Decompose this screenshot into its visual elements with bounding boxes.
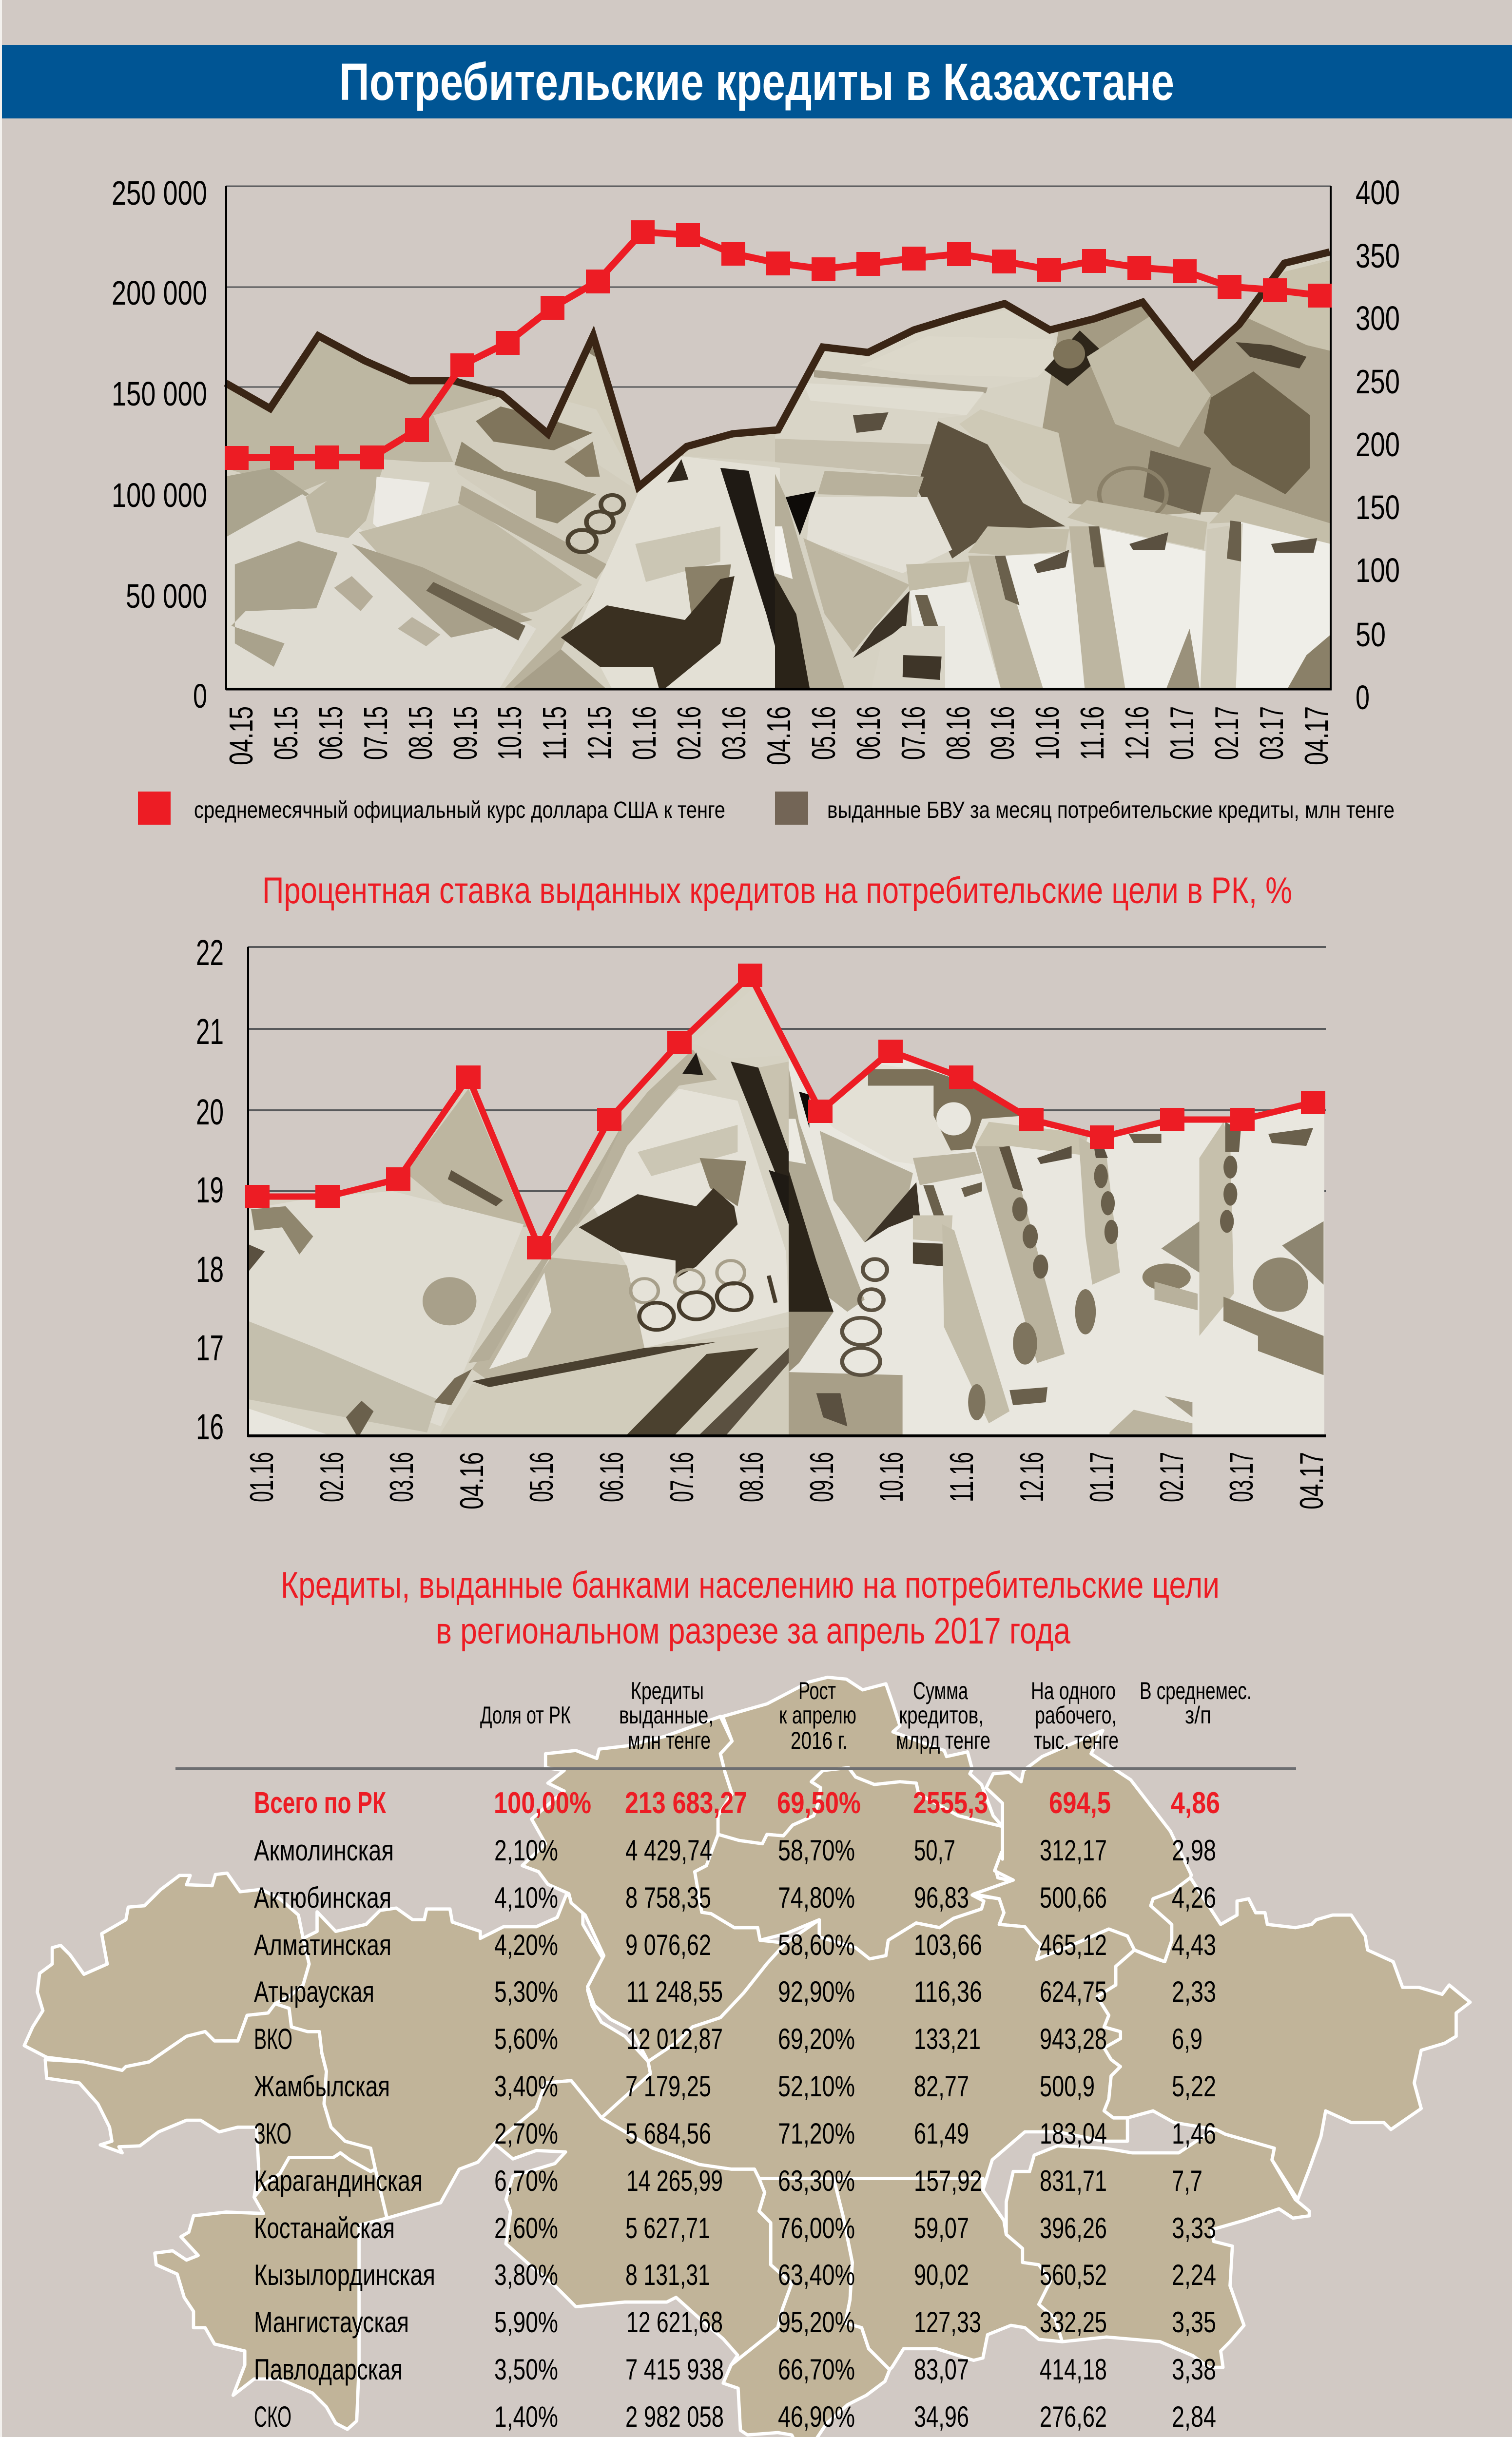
- table header: кредитов,: [899, 1702, 984, 1729]
- row: North Kazakhstan: СКО: [254, 2400, 291, 2433]
- table header: Кредиты: [631, 1677, 704, 1704]
- x axis labels: 03.16: [383, 1452, 420, 1502]
- row: Kyzylorda: 560,52: [1040, 2259, 1107, 2291]
- x axis labels: 01.17: [1163, 706, 1201, 760]
- row: Atyrau: 92,90%: [778, 1975, 855, 2008]
- x axis labels: 01.16: [243, 1452, 280, 1502]
- row: Zhambyl: Жамбылская: [254, 2070, 390, 2103]
- row: East Kazakhstan: 69,20%: [778, 2023, 855, 2055]
- row: total: 69,50%: [777, 1786, 861, 1820]
- row: East Kazakhstan: 943,28: [1040, 2023, 1107, 2055]
- map region: Kyzylorda: [494, 2081, 792, 2365]
- row: Kostanay: 5 627,71: [625, 2212, 710, 2244]
- left axis labels: 0: [193, 677, 207, 715]
- row: Karaganda: 6,70%: [494, 2165, 558, 2197]
- map region: Atyrau: [45, 2004, 375, 2197]
- row: Atyrau: Атырауская: [254, 1975, 374, 2008]
- row: West Kazakhstan: ЗКО: [254, 2117, 291, 2150]
- row: Mangystau: 3,35: [1172, 2306, 1216, 2339]
- row: Kyzylorda: 90,02: [914, 2259, 969, 2291]
- row: Pavlodar: 66,70%: [778, 2353, 855, 2386]
- x axis labels: 10.15: [491, 706, 528, 760]
- heading: regional loans: Кредиты, выданные банками населению на потребительские цели: [281, 1565, 1220, 1606]
- row: Karaganda: 63,30%: [778, 2165, 855, 2197]
- row: Kyzylorda: Кызылординская: [254, 2259, 435, 2291]
- row: Kyzylorda: 8 131,31: [625, 2259, 710, 2291]
- table header: Сумма: [913, 1677, 968, 1704]
- map region: East Kazakhstan: [1097, 1878, 1470, 2200]
- table header: тыс. тенге: [1034, 1727, 1119, 1754]
- legend item: loans issued: [775, 792, 1395, 825]
- legend item: loans issued: выданные БВУ за месяц потребительские кредиты, млн тенге: [827, 797, 1395, 823]
- x axis labels: 04.17: [1293, 1452, 1330, 1509]
- row: East Kazakhstan: ВКО: [254, 2023, 292, 2055]
- table header: к апрелю: [779, 1702, 856, 1729]
- x axis labels: 02.16: [313, 1452, 350, 1502]
- row: Zhambyl: 52,10%: [778, 2070, 855, 2103]
- x axis labels: 02.17: [1208, 706, 1245, 760]
- row: Mangystau: 12 621,68: [626, 2306, 723, 2339]
- row: Zhambyl: 3,40%: [494, 2070, 558, 2103]
- table header: В среднемес.: [1140, 1677, 1252, 1704]
- row: Karaganda: 157,92: [914, 2165, 982, 2197]
- row: Kostanay: 3,33: [1172, 2212, 1216, 2244]
- row: Akmola: 2,10%: [494, 1834, 558, 1867]
- row: Mangystau: 5,90%: [494, 2306, 558, 2339]
- row: Aktobe: 4,26: [1172, 1881, 1216, 1914]
- row: Kostanay: 2,60%: [494, 2212, 558, 2244]
- y axis labels: 19: [196, 1170, 224, 1210]
- row: East Kazakhstan: 6,9: [1172, 2023, 1202, 2055]
- row: Almaty region: Алматинская: [254, 1929, 391, 1961]
- map of Kazakhstan regions: [24, 1677, 1470, 2437]
- row: West Kazakhstan: 5 684,56: [625, 2117, 711, 2150]
- x axis labels: 09.15: [447, 706, 484, 760]
- row: West Kazakhstan: 183,04: [1040, 2117, 1107, 2150]
- row: East Kazakhstan: 5,60%: [494, 2023, 558, 2055]
- map region: Kostanay: [522, 1717, 786, 2062]
- chart: consumer loans and USD rate: [112, 174, 1400, 765]
- row: Kostanay: 396,26: [1040, 2212, 1107, 2244]
- x axis labels: 07.16: [663, 1452, 700, 1502]
- map region: Mangystau: [155, 2153, 387, 2429]
- x axis labels: 11.16: [1074, 706, 1111, 760]
- right axis labels: 350: [1356, 237, 1400, 275]
- table header: млн тенге: [628, 1727, 711, 1754]
- legend: [138, 792, 1395, 825]
- right axis labels: 100: [1356, 551, 1400, 589]
- x axis labels: 03.17: [1253, 706, 1290, 760]
- row: Almaty region: 103,66: [914, 1929, 982, 1961]
- row: Akmola: 312,17: [1040, 1834, 1107, 1867]
- table header: На одного: [1031, 1677, 1116, 1704]
- row: Kostanay: [254, 2212, 1216, 2244]
- row: Mangystau: [254, 2306, 1216, 2339]
- x axis labels: 12.16: [1013, 1452, 1050, 1502]
- row: Mangystau: Мангистауская: [254, 2306, 409, 2339]
- row: Zhambyl: 7 179,25: [625, 2070, 711, 2103]
- row: East Kazakhstan: 12 012,87: [626, 2023, 723, 2055]
- map region: Akmola: [695, 1768, 1012, 1959]
- row: Almaty region: 9 076,62: [625, 1929, 711, 1961]
- heading: regional loans: в региональном разрезе за апрель 2017 года: [436, 1610, 1071, 1652]
- row: Kyzylorda: 3,80%: [494, 2259, 558, 2291]
- x axis labels: 12.16: [1119, 706, 1156, 760]
- x axis labels: 08.16: [940, 706, 977, 760]
- y axis labels: 16: [196, 1407, 224, 1447]
- row: Zhambyl: 5,22: [1172, 2070, 1216, 2103]
- x axis labels: 01.16: [626, 706, 663, 760]
- map region: Zhambyl: [834, 2179, 1062, 2370]
- row: Mangystau: 332,25: [1040, 2306, 1107, 2339]
- row: Kostanay: 59,07: [914, 2212, 969, 2244]
- row: total: [254, 1786, 1220, 1820]
- x axis labels: 06.16: [593, 1452, 630, 1502]
- x axis labels: 02.16: [671, 706, 708, 760]
- map region: West Kazakhstan: [24, 1873, 309, 2070]
- left axis labels: [112, 174, 207, 715]
- x axis labels: 02.17: [1153, 1452, 1190, 1502]
- row: Akmola: 58,70%: [778, 1834, 855, 1867]
- row: West Kazakhstan: 71,20%: [778, 2117, 855, 2150]
- row: total: 2555,3: [913, 1786, 988, 1820]
- title: Потребительские кредиты в Казахстане: [339, 52, 1174, 111]
- x axis labels: [243, 1452, 1330, 1509]
- row: North Kazakhstan: 1,40%: [494, 2400, 558, 2433]
- row: Zhambyl: 82,77: [914, 2070, 969, 2103]
- row: Atyrau: 5,30%: [494, 1975, 558, 2008]
- x axis labels: 10.16: [873, 1452, 910, 1502]
- axes: [248, 947, 1326, 1437]
- row: North Kazakhstan: 2 982 058: [625, 2400, 724, 2433]
- row: East Kazakhstan: 133,21: [914, 2023, 981, 2055]
- row: Pavlodar: 3,38: [1172, 2353, 1216, 2386]
- table header: Доля от РК: [480, 1702, 571, 1729]
- left axis labels: 200 000: [112, 274, 207, 312]
- x axis labels: 12.15: [581, 706, 618, 760]
- x axis labels: [223, 706, 1335, 765]
- row: total: Всего по РК: [254, 1786, 386, 1820]
- map region: Aktobe: [275, 1894, 650, 2218]
- x axis labels: 07.15: [357, 706, 394, 760]
- right axis labels: 50: [1356, 616, 1386, 654]
- row: Akmola: [254, 1834, 1216, 1867]
- row: Kyzylorda: [254, 2259, 1216, 2291]
- map region: Karaganda: [601, 1895, 1134, 2190]
- grid lines: [248, 947, 1326, 1191]
- row: Aktobe: 8 758,35: [625, 1881, 711, 1914]
- x axis labels: 11.16: [943, 1452, 980, 1502]
- right axis labels: 150: [1356, 488, 1400, 526]
- x axis labels: 08.15: [402, 706, 439, 760]
- x axis labels: 01.17: [1083, 1452, 1120, 1502]
- left axis labels: 150 000: [112, 375, 207, 413]
- line: USD exchange rate: [225, 220, 1332, 470]
- row: Almaty region: 4,20%: [494, 1929, 558, 1961]
- row: Karaganda: 831,71: [1040, 2165, 1107, 2197]
- x axis labels: 05.16: [805, 706, 842, 760]
- row: Aktobe: Актюбинская: [254, 1881, 391, 1914]
- row: Aktobe: 96,83: [914, 1881, 969, 1914]
- row: North Kazakhstan: 34,96: [914, 2400, 969, 2433]
- map region: Pavlodar: [973, 1730, 1191, 1962]
- row: Karaganda: Карагандинская: [254, 2165, 423, 2197]
- heading: interest rate: Процентная ставка выданных кредитов на потребительские цели в РК, %: [262, 870, 1292, 911]
- row: Mangystau: 95,20%: [778, 2306, 855, 2339]
- row: Karaganda: 7,7: [1172, 2165, 1202, 2197]
- x axis labels: 08.16: [733, 1452, 770, 1502]
- row: Almaty region: 4,43: [1172, 1929, 1216, 1961]
- right axis labels: [1356, 174, 1400, 716]
- row: Kostanay: 76,00%: [778, 2212, 855, 2244]
- row: Akmola: 2,98: [1172, 1834, 1216, 1867]
- area: banknote photo fill: [224, 244, 1332, 693]
- legend item: exchange rate: среднемесячный официальный курс доллара США к тенге: [194, 797, 725, 823]
- y axis labels: 17: [196, 1328, 224, 1368]
- x axis labels: 04.16: [453, 1452, 490, 1509]
- row: Pavlodar: 83,07: [914, 2353, 969, 2386]
- x axis labels: 07.16: [895, 706, 932, 760]
- left axis labels: 100 000: [112, 476, 207, 514]
- y axis labels: 18: [196, 1249, 224, 1290]
- x axis labels: 03.17: [1223, 1452, 1260, 1502]
- map region: North Kazakhstan: [718, 1677, 1003, 1844]
- row: West Kazakhstan: 61,49: [914, 2117, 969, 2150]
- x axis labels: 05.15: [268, 706, 305, 760]
- row: Pavlodar: 3,50%: [494, 2353, 558, 2386]
- row: Kyzylorda: 63,40%: [778, 2259, 855, 2291]
- row: Pavlodar: [254, 2353, 1216, 2386]
- grid lines: [226, 186, 1331, 487]
- x axis labels: 04.16: [760, 706, 797, 765]
- row: Kyzylorda: 2,24: [1172, 2259, 1216, 2291]
- row: Aktobe: 4,10%: [494, 1881, 558, 1914]
- table header: рабочего,: [1035, 1702, 1117, 1729]
- y axis labels: 21: [196, 1011, 224, 1052]
- row: Almaty region: 58,60%: [778, 1929, 855, 1961]
- table header: млрд тенге: [896, 1727, 990, 1754]
- row: Akmola: 4 429,74: [625, 1834, 712, 1867]
- y axis labels: 22: [196, 932, 224, 973]
- row: Akmola: Акмолинская: [254, 1834, 394, 1867]
- row: North Kazakhstan: 2,84: [1172, 2400, 1216, 2433]
- row: Aktobe: 74,80%: [778, 1881, 855, 1914]
- row: North Kazakhstan: 46,90%: [778, 2400, 855, 2433]
- right axis labels: 200: [1356, 426, 1400, 464]
- row: Atyrau: 11 248,55: [626, 1975, 723, 2008]
- row: total: 4,86: [1171, 1786, 1220, 1820]
- y axis labels: 20: [196, 1092, 224, 1132]
- right axis labels: 0: [1356, 678, 1370, 716]
- row: total: 694,5: [1049, 1786, 1111, 1820]
- x axis labels: 06.15: [312, 706, 349, 760]
- row: West Kazakhstan: 1,46: [1172, 2117, 1216, 2150]
- row: Aktobe: 500,66: [1040, 1881, 1107, 1914]
- row: Akmola: 50,7: [914, 1834, 955, 1867]
- area: banknote photo fill: [248, 965, 1330, 1438]
- x axis labels: 09.16: [984, 706, 1021, 760]
- map region: South Kazakhstan: [723, 2179, 890, 2437]
- right axis labels: 400: [1356, 174, 1400, 212]
- row: East Kazakhstan: [254, 2023, 1202, 2055]
- right axis labels: 250: [1356, 363, 1400, 401]
- row: West Kazakhstan: 2,70%: [494, 2117, 558, 2150]
- table: [175, 1677, 1296, 2437]
- heading: regional loans: [281, 1565, 1220, 1652]
- row: Atyrau: [254, 1975, 1216, 2008]
- table header: выданные,: [619, 1702, 714, 1729]
- axes: [226, 186, 1332, 690]
- y axis labels: [196, 932, 224, 1447]
- row: total: 213 683,27: [625, 1786, 747, 1820]
- left axis labels: 250 000: [112, 174, 207, 212]
- title banner: [2, 45, 1512, 118]
- table header: 2016 г.: [791, 1727, 848, 1754]
- x axis labels: 09.16: [803, 1452, 840, 1502]
- row: Pavlodar: 414,18: [1040, 2353, 1107, 2386]
- x axis labels: 06.16: [850, 706, 887, 760]
- row: Zhambyl: [254, 2070, 1216, 2103]
- legend item: exchange rate: [138, 792, 725, 825]
- x axis labels: 03.16: [716, 706, 753, 760]
- map region: Almaty: [1006, 2129, 1309, 2367]
- row: North Kazakhstan: [254, 2400, 1216, 2433]
- x axis labels: 10.16: [1029, 706, 1066, 760]
- row: Almaty region: 465,12: [1040, 1929, 1107, 1961]
- row: Atyrau: 624,75: [1040, 1975, 1107, 2008]
- row: Atyrau: 2,33: [1172, 1975, 1216, 2008]
- left axis labels: 50 000: [126, 577, 207, 615]
- x axis labels: 04.17: [1298, 706, 1335, 765]
- row: North Kazakhstan: 276,62: [1040, 2400, 1107, 2433]
- row: total: 100,00%: [494, 1786, 591, 1820]
- chart: interest rate: [196, 932, 1330, 1509]
- row: Pavlodar: 7 415 938: [625, 2353, 724, 2386]
- row: Kostanay: Костанайская: [254, 2212, 395, 2244]
- row: Aktobe: [254, 1881, 1216, 1914]
- row: Atyrau: 116,36: [914, 1975, 982, 2008]
- right axis labels: 300: [1356, 299, 1400, 337]
- table header: [480, 1677, 1252, 1754]
- line: interest rate: [245, 964, 1325, 1259]
- x axis labels: 04.15: [223, 706, 260, 765]
- row: Pavlodar: Павлодарская: [254, 2353, 403, 2386]
- row: Almaty region: [254, 1929, 1216, 1961]
- row: Karaganda: [254, 2165, 1202, 2197]
- header rule: [175, 1767, 1296, 1770]
- row: West Kazakhstan: [254, 2117, 1216, 2150]
- row: Karaganda: 14 265,99: [626, 2165, 723, 2197]
- area outline: loans issued: [226, 252, 1330, 487]
- row: Zhambyl: 500,9: [1040, 2070, 1095, 2103]
- x axis labels: 05.16: [523, 1452, 560, 1502]
- table header: з/п: [1185, 1702, 1211, 1729]
- x axis labels: 11.15: [536, 706, 573, 760]
- row: Mangystau: 127,33: [914, 2306, 981, 2339]
- table header: Рост: [798, 1677, 836, 1704]
